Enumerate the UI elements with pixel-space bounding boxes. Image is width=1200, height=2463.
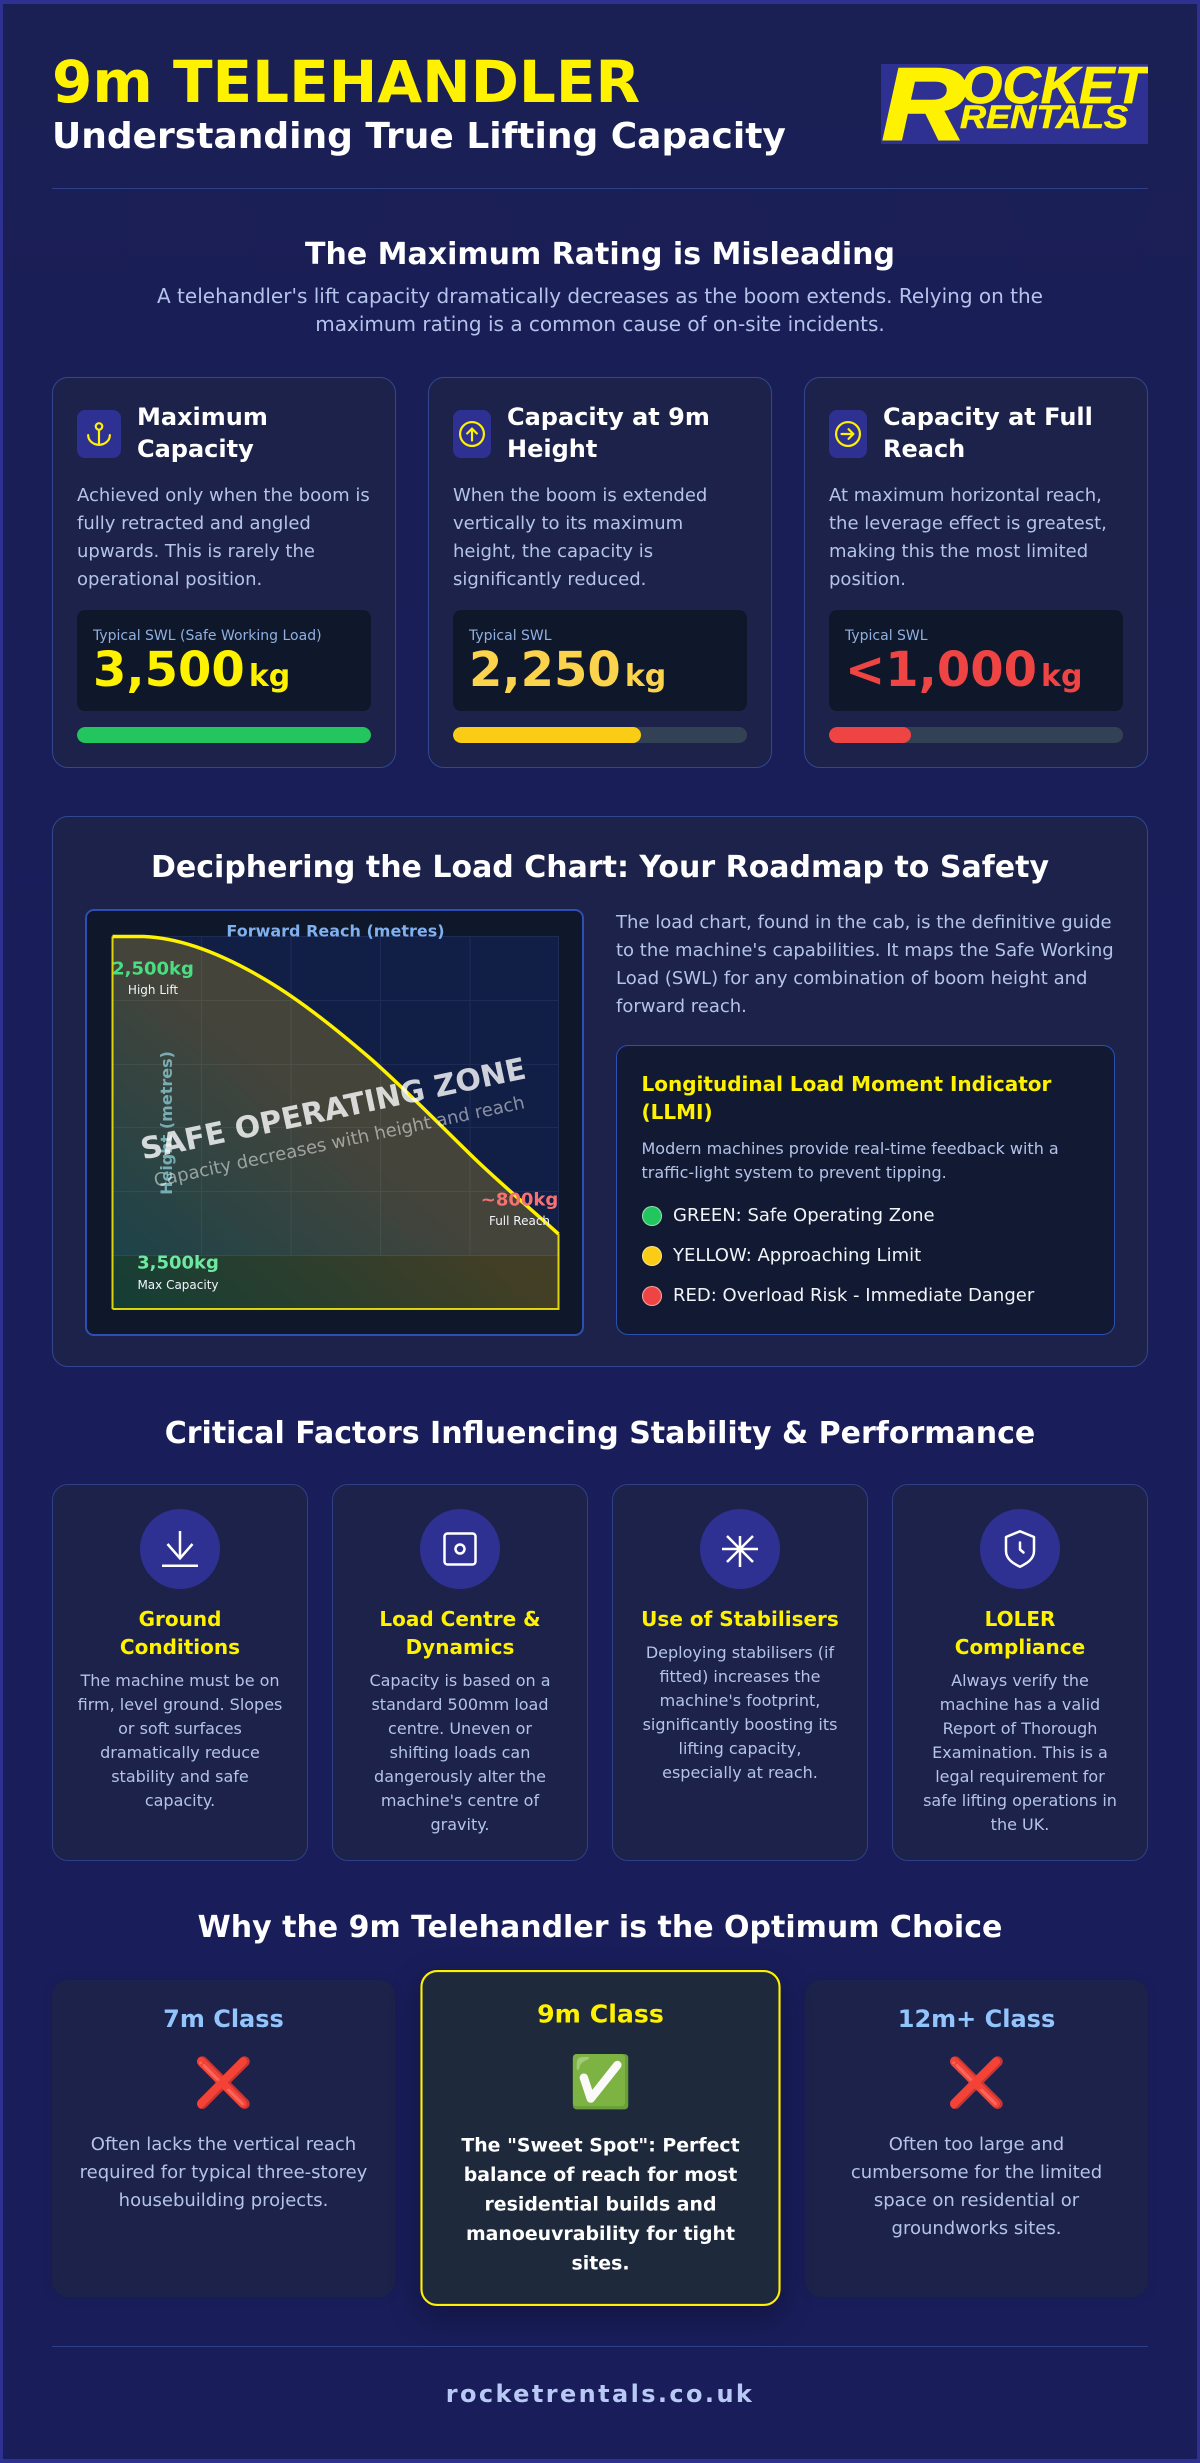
heading: optimum choice: Why the 9m Telehandler is the Optimum Choice (198, 1910, 1002, 1945)
heading: Capacity at 9m (507, 403, 710, 431)
description: When the boom is extended vertically to its maximum height, the capacity is significantly reduced. (453, 485, 707, 590)
heading: Conditions (120, 1635, 240, 1659)
heading: maximum rating: The Maximum Rating is Misleading (305, 237, 895, 272)
load chart description: The load chart, found in the cab, is the definitive guide to the machine's capabilities. It maps the Safe Working Load (SWL) for any combination of boom height and forward reach. (616, 912, 1114, 1017)
heading (120, 1607, 240, 1659)
icon: arrow up (453, 410, 491, 458)
icon: ground arrow (140, 1509, 220, 1589)
legend: red: RED: Overload Risk - Immediate Danger (673, 1285, 1034, 1306)
data label: 2,500kg: High Lift (128, 983, 178, 997)
icon: shield clock (980, 1509, 1060, 1589)
data label: ~800kg: ~800kg (481, 1190, 558, 1210)
title: 9m TELEHANDLER (52, 48, 640, 116)
data label: 2,500kg (112, 958, 194, 997)
icon: cross: ❌ (194, 2054, 253, 2111)
grid (112, 936, 559, 1256)
stat: under 1,000 kg: <1,000kg (845, 642, 1082, 698)
heading: Ground (139, 1607, 221, 1631)
factor: stabilisers (612, 1484, 868, 1861)
stat: 3,500 kg: Typical SWL (Safe Working Load) (93, 628, 322, 644)
option: 7m class (52, 1980, 395, 2297)
heading (955, 1607, 1085, 1659)
option: 9m class highlighted (420, 1970, 780, 2306)
heading: Load Centre & (379, 1607, 541, 1631)
icon: load square (420, 1509, 500, 1589)
data label: ~800kg (481, 1190, 558, 1228)
intro text (157, 284, 1043, 336)
icon: arrow right (829, 410, 867, 458)
icon: tick: ✅ (569, 2052, 631, 2112)
stat: under 1,000 kg: Typical SWL (845, 628, 928, 644)
heading (507, 403, 710, 463)
stat: under 1,000 kg (829, 610, 1123, 711)
class name: 9m Class (537, 1999, 663, 2029)
heading: Compliance (955, 1635, 1085, 1659)
class name: 12m+ Class (898, 2005, 1055, 2033)
panel: capacity at 9m height (428, 377, 772, 768)
axis label: height: Height (metres) (157, 1051, 176, 1195)
heading: critical factors: Critical Factors Influencing Stability & Performance (165, 1416, 1035, 1451)
load chart (85, 909, 584, 1336)
icon: stabiliser star (700, 1509, 780, 1589)
heading: Capacity (137, 435, 254, 463)
panel: capacity at full reach (804, 377, 1148, 768)
heading: Maximum (137, 403, 268, 431)
factor: LOLER (892, 1484, 1148, 1861)
data label: 2,500kg: 2,500kg (112, 958, 194, 980)
panel: maximum capacity (52, 377, 396, 768)
heading (379, 1607, 541, 1659)
option: 12m class (805, 1980, 1148, 2297)
heading: Use of Stabilisers (641, 1607, 839, 1631)
data label: 3,500kg (137, 1252, 219, 1292)
heading: Reach (883, 435, 965, 463)
subtitle: Understanding True Lifting Capacity (52, 116, 786, 157)
capacity bar (77, 727, 371, 743)
logo: Rocket Rentals: RENTALS (960, 99, 1129, 135)
capacity bar (829, 727, 1123, 743)
data label: 3,500kg: Max Capacity (137, 1278, 219, 1292)
stat: 3,500 kg (77, 610, 371, 711)
icon: cross: ❌ (947, 2054, 1006, 2111)
heading (883, 403, 1093, 463)
description: Always verify the machine has a valid Report of Thorough Examination. This is a legal requirement for safe lifting operations in the UK. (923, 1671, 1117, 1834)
heading (137, 403, 268, 463)
safe operating zone (112, 936, 558, 1309)
data label: 3,500kg: 3,500kg (137, 1252, 219, 1274)
capacity bar (453, 727, 747, 743)
zone sublabel: Capacity decreases with height and reach (152, 1092, 527, 1192)
description: The "Sweet Spot": Perfect balance of reach for most residential builds and manoeuvrability for tight sites. (461, 2134, 739, 2274)
legend: yellow: YELLOW: Approaching Limit (673, 1245, 921, 1266)
heading: Capacity at Full (883, 403, 1093, 431)
intro text: maximum rating is a common cause of on-site incidents. (315, 312, 885, 336)
factor: load centre (332, 1484, 588, 1861)
legend: green: GREEN: Safe Operating Zone (673, 1205, 935, 1226)
LLMI description: Modern machines provide real-time feedback with a traffic-light system to prevent tipping. (642, 1139, 1059, 1182)
description: Capacity is based on a standard 500mm load centre. Uneven or shifting loads can dangerously alter the machine's centre of gravity. (369, 1671, 551, 1834)
data label: ~800kg: Full Reach (489, 1214, 550, 1228)
heading: Height (507, 435, 597, 463)
stat: 2,250 kg (453, 610, 747, 711)
description: Deploying stabilisers (if fitted) increases the machine's footprint, significantly boosting its lifting capacity, especially at reach. (643, 1643, 837, 1782)
intro text: A telehandler's lift capacity dramatically decreases as the boom extends. Relying on the (157, 284, 1043, 308)
zone label: SAFE OPERATING ZONE (138, 1052, 529, 1167)
description: Achieved only when the boom is fully retracted and angled upwards. This is rarely the operational position. (77, 485, 370, 590)
description: The machine must be on firm, level ground. Slopes or soft surfaces dramatically reduce stability and safe capacity. (78, 1671, 282, 1810)
logo: Rocket Rentals (881, 64, 1148, 144)
axis label: forward reach: Forward Reach (metres) (226, 922, 445, 940)
heading: Dynamics (406, 1635, 514, 1659)
LLMI heading: Longitudinal Load Moment Indicator (LLMI) (642, 1072, 1051, 1124)
description: Often too large and cumbersome for the limited space on residential or groundworks sites. (851, 2134, 1102, 2239)
class name: 7m Class (163, 2005, 284, 2033)
footer: website: rocketrentals.co.uk (446, 2380, 754, 2408)
heading: LOLER (985, 1607, 1055, 1631)
stat: 2,250 kg: 2,250kg (469, 642, 666, 698)
description: Often lacks the vertical reach required for typical three-storey housebuilding projects. (80, 2134, 367, 2211)
stat: 2,250 kg: Typical SWL (469, 628, 552, 644)
panel: load chart (52, 816, 1148, 1367)
stat: 3,500 kg: 3,500kg (93, 642, 290, 698)
factor: ground conditions (52, 1484, 308, 1861)
description: At maximum horizontal reach, the leverage effect is greatest, making this the most limited position. (829, 485, 1107, 590)
icon: anchor (77, 410, 121, 458)
heading: Deciphering the Load Chart: Your Roadmap to Safety (151, 850, 1049, 885)
panel: LLMI (616, 1045, 1115, 1335)
